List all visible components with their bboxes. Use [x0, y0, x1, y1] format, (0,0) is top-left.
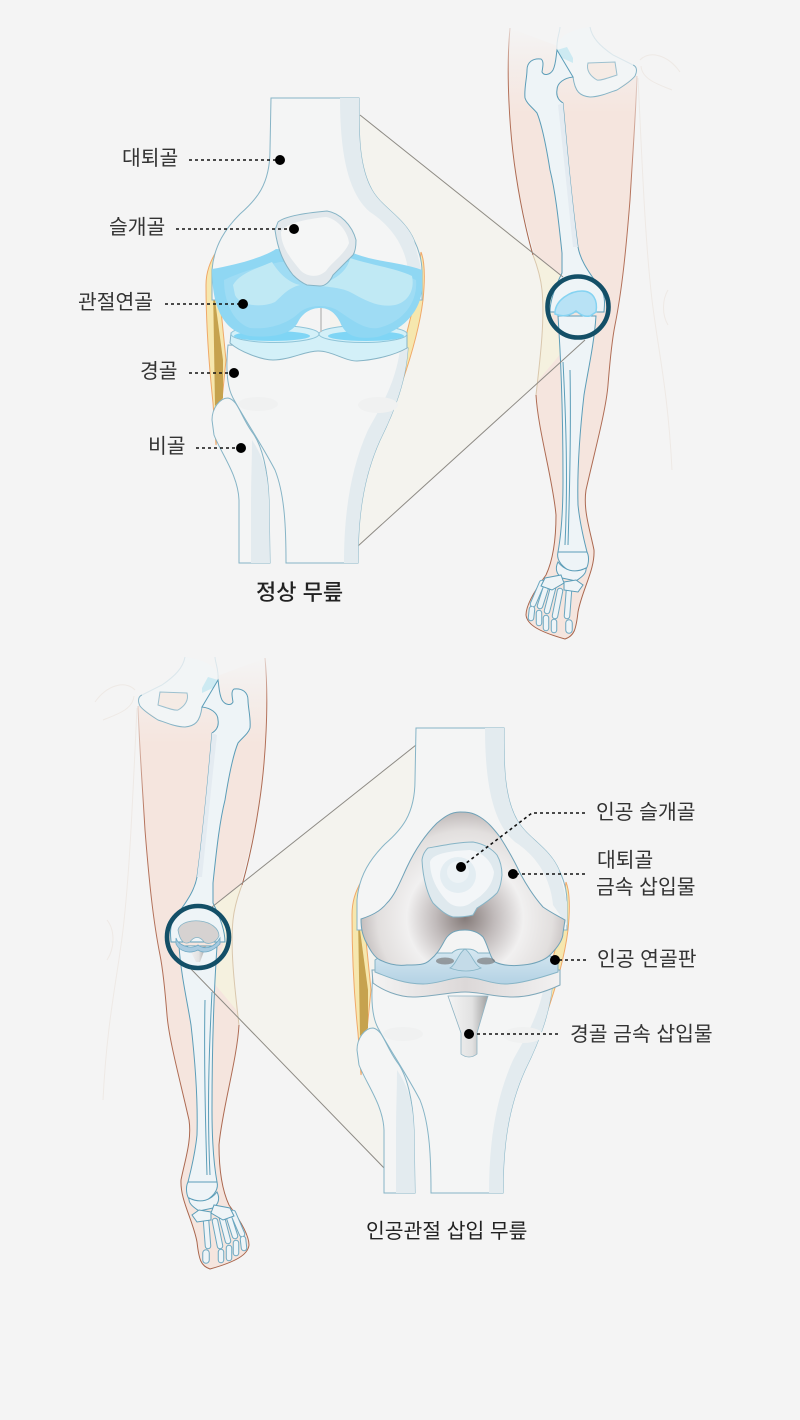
faint opposite leg [638, 55, 680, 470]
fibula [357, 1028, 415, 1193]
femur [357, 728, 567, 930]
pelvis [557, 27, 637, 97]
yellow tissue left [206, 250, 226, 445]
cartilage mid tone [224, 262, 416, 328]
icon: mini knee implant [176, 921, 220, 962]
label: 비골 [148, 435, 246, 458]
tibia [372, 975, 553, 1193]
magnifier circle bottom [167, 906, 229, 968]
label: 대퇴골 금속 삽입물 [508, 849, 695, 899]
pelvis [138, 657, 218, 727]
yellow tissue left [352, 880, 371, 1075]
foot bones [186, 1182, 244, 1260]
label: 경골 금속 삽입물 [464, 1023, 713, 1046]
tibial metal plate [372, 970, 560, 997]
label: 관절연골: 관절연골 [78, 291, 153, 314]
pelvis hole [587, 62, 617, 80]
central tibial spine [450, 949, 481, 971]
yellow tissue right [375, 252, 424, 430]
pelvis hole [158, 692, 188, 710]
artificial patella [422, 842, 502, 917]
fibula shading [396, 1070, 415, 1193]
femur [212, 98, 422, 300]
femur small [170, 680, 250, 942]
label: 경골 [140, 360, 239, 383]
label: 경골: 경골 [140, 360, 178, 383]
tibial stem [448, 996, 488, 1057]
label: 관절연골 [78, 291, 248, 314]
label: 대퇴골 금속 삽입물: 대퇴골 [597, 849, 653, 872]
label: 인공 슬개골 [456, 801, 695, 872]
femoral cartilage [212, 249, 422, 338]
skin [138, 658, 267, 1269]
illustration: full leg, implant knee [95, 657, 267, 1269]
ligament brown [358, 915, 368, 1036]
artificial meniscus insert [375, 949, 558, 984]
label: 인공 연골판: 인공 연골판 [597, 948, 697, 971]
magnifier circle top [548, 276, 608, 338]
femur small [525, 50, 604, 312]
panel: bottom zoom projection [190, 745, 440, 1170]
dark contact shadows [436, 958, 495, 964]
title: normal knee: 정상 무릎 [256, 580, 343, 605]
meniscus left surface [231, 326, 319, 342]
tibia shading [344, 348, 408, 563]
label: 대퇴골 금속 삽입물: 금속 삽입물 [596, 876, 695, 899]
cartilage shadow [234, 331, 404, 341]
femur shading [340, 98, 422, 272]
zoom guide lines top [358, 115, 585, 546]
cartilage spot on hip [557, 47, 573, 63]
fibula shading [251, 440, 270, 563]
faint tibia shadows [238, 397, 398, 413]
skin outlines [138, 658, 267, 1269]
pale yellow tissue near knee [213, 885, 241, 1012]
meniscus right surface [319, 326, 407, 342]
label: 대퇴골: 대퇴골 [122, 147, 178, 170]
fibula [212, 398, 270, 563]
cartilage spot on hip [202, 677, 218, 693]
foot bones [531, 552, 589, 630]
label: 인공 연골판 [550, 948, 697, 971]
ligament brown [213, 285, 223, 406]
title: implant knee: 인공관절 삽입 무릎 [366, 1220, 527, 1243]
illustration: full leg, normal knee [508, 27, 680, 639]
faint tibia shadows [383, 1027, 543, 1043]
illustration: normal knee anatomy [206, 98, 424, 563]
label: 대퇴골 [122, 147, 285, 170]
label: 슬개골: 슬개골 [109, 216, 165, 239]
femur shading [485, 728, 567, 925]
skin [508, 28, 637, 639]
tibia and fibula small [558, 316, 596, 552]
femoral metal implant [361, 812, 565, 966]
label: 비골: 비골 [148, 435, 186, 458]
pale yellow tissue near knee [534, 255, 562, 382]
panel: top zoom projection [330, 115, 585, 546]
yellow tissue right [520, 882, 569, 1060]
label: 경골 금속 삽입물: 경골 금속 삽입물 [570, 1023, 713, 1046]
skin outlines [508, 28, 637, 639]
illustration: implant knee anatomy [352, 728, 569, 1193]
label: 인공 슬개골: 인공 슬개골 [596, 801, 695, 824]
tibia [227, 345, 408, 563]
cartilage highlights [233, 258, 413, 306]
meniscus disc [230, 333, 407, 361]
icon: mini knee cartilage [555, 291, 596, 316]
zoom guide lines bottom [190, 745, 416, 1170]
label: 슬개골 [109, 216, 299, 239]
patella [275, 211, 356, 286]
notch ligament [320, 308, 322, 332]
faint opposite leg [95, 685, 137, 1100]
tibia and fibula small [179, 946, 217, 1182]
tibia shading [489, 978, 553, 1193]
